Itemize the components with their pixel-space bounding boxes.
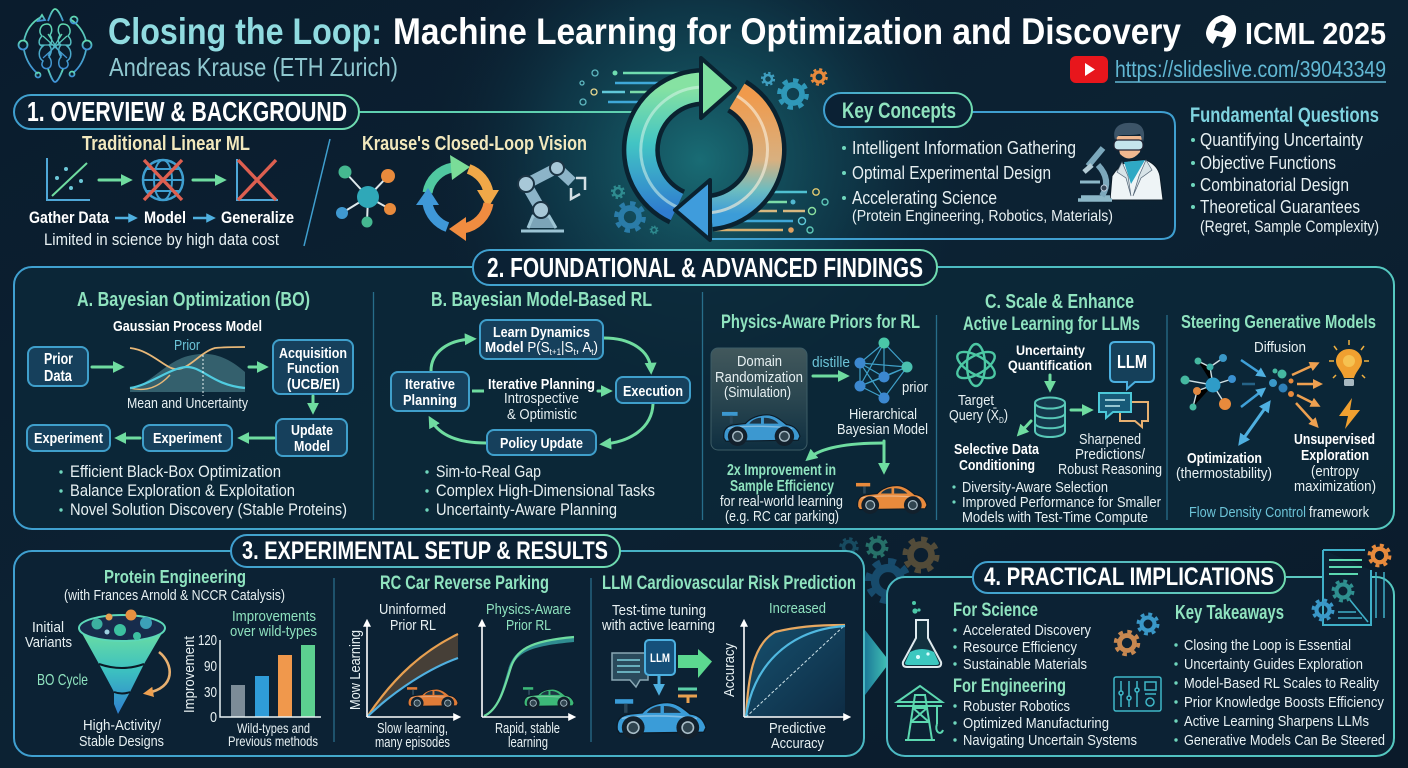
icon: sliders panel xyxy=(1114,677,1161,711)
panel: key concepts xyxy=(824,93,1175,239)
label: initial variants: Initial xyxy=(32,619,64,636)
heading: RC Car Reverse Parking xyxy=(380,573,549,594)
box: domain randomization: Randomization xyxy=(715,369,803,386)
icon: scatter chart xyxy=(47,158,90,200)
icon: database xyxy=(1035,398,1065,437)
arrow xyxy=(92,366,120,368)
callout: 2x improvement: (e.g. RC car parking) xyxy=(725,508,839,525)
bullet list: Models with Test-Time Compute xyxy=(962,509,1148,526)
engineering list: Optimized Manufacturing xyxy=(963,715,1109,732)
label: sharpened predictions xyxy=(1058,431,1162,478)
panel C: scale and enhance xyxy=(949,291,1162,526)
takeaways list: Active Learning Sharpens LLMs xyxy=(1184,713,1369,730)
chart: predictive accuracy: Accuracy xyxy=(771,735,824,752)
label: target query: Target xyxy=(958,392,995,409)
science list: Accelerated Discovery xyxy=(963,622,1091,639)
takeaways list xyxy=(1174,637,1385,749)
section 4: practical implications xyxy=(887,545,1394,756)
double arrow: optimization xyxy=(1241,404,1268,442)
box: prior data xyxy=(28,347,88,386)
box: learn dynamics: t xyxy=(591,347,594,357)
questions list: Combinatorial Design xyxy=(1200,175,1349,195)
caption: flow density control: Flow Density Control xyxy=(1189,504,1306,521)
icon: bayesian network xyxy=(854,338,912,404)
icon: LLM speech bubble: LLM xyxy=(1117,352,1147,372)
science list xyxy=(953,622,1091,673)
caption: Limited in science by high data cost xyxy=(44,230,279,249)
label: uncertainty quantification xyxy=(1008,342,1092,373)
icon: blue car xyxy=(615,699,706,739)
label: prior: prior xyxy=(902,379,928,396)
takeaways list: Uncertainty Guides Exploration xyxy=(1184,656,1363,673)
bar chart: improvements: over wild-types xyxy=(230,623,317,640)
label: uncertainty quantification: Quantification xyxy=(1008,357,1092,373)
box: execution: Execution xyxy=(623,383,683,400)
questions list: Theoretical Guarantees xyxy=(1200,197,1360,217)
heading: key concepts xyxy=(824,93,972,127)
icon: crossed-out generalization chart xyxy=(237,159,278,200)
chart: uninformed prior RL: many episodes xyxy=(375,734,450,751)
label: initial variants: Variants xyxy=(25,634,72,651)
box: experiment xyxy=(143,425,232,451)
box: acquisition function: Acquisition xyxy=(279,345,347,362)
takeaways list: Closing the Loop is Essential xyxy=(1184,637,1351,654)
arrow xyxy=(193,178,222,182)
box: learn dynamics: t xyxy=(573,347,576,357)
key concepts list: Intelligent Information Gathering xyxy=(852,138,1076,158)
box: experiment xyxy=(27,425,110,451)
connector line xyxy=(359,111,640,113)
bullet list: Sim-to-Real Gap xyxy=(436,462,541,481)
box: domain randomization: Domain xyxy=(737,353,782,370)
box: prior data: Prior xyxy=(44,351,73,368)
pipeline labels xyxy=(29,208,294,227)
box: learn dynamics: , A xyxy=(576,339,591,356)
icon: latent cluster xyxy=(1269,368,1294,397)
box: policy update: Policy Update xyxy=(500,435,583,452)
label: selective data conditioning xyxy=(954,441,1040,474)
arrow xyxy=(119,436,140,440)
chart: physics-aware prior RL: Physics-Aware xyxy=(486,601,571,618)
label: test-time tuning: with active learning xyxy=(601,617,715,634)
center label: iterative planning xyxy=(472,376,608,423)
heading: section 1: 1. OVERVIEW & BACKGROUND xyxy=(27,96,347,127)
bullet list: Diversity-Aware Selection xyxy=(962,479,1108,496)
engineering list: Robuster Robotics xyxy=(963,698,1070,715)
heading: section 2: 2. FOUNDATIONAL & ADVANCED FINDINGS xyxy=(487,252,923,283)
section 1: overview and background xyxy=(14,95,640,249)
callout: 2x improvement: 2x Improvement in xyxy=(727,462,836,479)
box: execution xyxy=(616,377,690,403)
chart: gaussian process: Mean and Uncertainty xyxy=(127,395,248,412)
heading: key concepts: Key Concepts xyxy=(842,98,956,123)
chart: predictive accuracy: Increased xyxy=(769,600,826,617)
key concepts list: Accelerating Science xyxy=(852,188,997,208)
label: sharpened predictions: Robust Reasoning xyxy=(1058,461,1162,478)
label: test-time tuning: Test-time tuning xyxy=(612,602,706,619)
icon: gears xyxy=(1116,614,1158,654)
label: diffusion: Diffusion xyxy=(1254,339,1306,356)
title: Machine Learning for Optimization and Discovery xyxy=(393,11,1181,52)
box: update model: Update xyxy=(291,422,333,439)
box: experiment: Experiment xyxy=(34,430,103,447)
chart: gaussian process: Prior xyxy=(174,337,200,354)
chart: predictive accuracy xyxy=(721,600,848,752)
bullet list: Complex High-Dimensional Tasks xyxy=(436,481,655,500)
heading: Protein Engineering xyxy=(104,567,246,587)
label: target query: Query (X̄ xyxy=(949,407,1009,424)
result arrows xyxy=(809,441,884,470)
box: acquisition function: (UCB/EI) xyxy=(287,376,340,393)
label: hierarchical bayesian model xyxy=(837,406,928,438)
label: selective data conditioning: Selective Data xyxy=(954,441,1040,458)
heading: B. Bayesian Model-Based RL xyxy=(431,289,652,311)
label: optimization xyxy=(1176,450,1272,482)
callout: 2x improvement: for real-world learning xyxy=(720,493,843,510)
box: update model: Model xyxy=(294,438,330,455)
icon: LLM speech bubble xyxy=(1110,342,1154,389)
bar chart: improvements: Wild-types and xyxy=(237,720,310,736)
decorative gears around loop xyxy=(612,69,827,234)
chart: uninformed prior RL: Slow learning, xyxy=(377,720,448,737)
generation arrows out xyxy=(1292,364,1319,425)
bullet list: Efficient Black-Box Optimization xyxy=(70,462,281,481)
conference name: ICML 2025 xyxy=(1245,16,1386,51)
questions list: Quantifying Uncertainty xyxy=(1200,130,1363,150)
icon: crossed-out model globe xyxy=(143,160,183,200)
bullet list: Balance Exploration & Exploitation xyxy=(70,481,295,500)
label: test-time tuning xyxy=(601,602,715,634)
label: optimization: (thermostability) xyxy=(1176,465,1272,482)
box: learn dynamics: Learn Dynamics xyxy=(493,324,590,341)
box: iterative planning xyxy=(391,372,469,411)
chart heading: Gaussian Process Model xyxy=(113,318,262,335)
bullet list: Improved Performance for Smaller xyxy=(962,494,1161,511)
chart: physics-aware prior RL: Rapid, stable xyxy=(495,720,560,737)
icon: light bulb xyxy=(1329,340,1369,386)
box: LLM xyxy=(645,640,675,675)
icon: flask xyxy=(903,601,941,667)
icon: brain network logo xyxy=(18,9,92,82)
bar chart: improvements: Improvements xyxy=(232,608,316,625)
icon: molecule xyxy=(336,166,396,228)
arrow: output xyxy=(678,649,712,678)
icon: video play xyxy=(1070,56,1108,83)
arrow: down xyxy=(658,676,660,691)
heading: for science: For Science xyxy=(953,600,1038,621)
box: learn dynamics: |S xyxy=(561,339,573,356)
header xyxy=(18,9,1386,83)
cycle arrows xyxy=(431,338,653,444)
label: target query: D xyxy=(999,416,1004,425)
heading: closed-loop vision: Krause's Closed-Loop Vision xyxy=(362,133,587,155)
heading: section 2 xyxy=(473,250,937,285)
icon: knot logo xyxy=(953,344,999,386)
arrow xyxy=(1048,375,1052,388)
icon: small closed loop xyxy=(416,155,499,241)
subheading: (with Frances Arnold & NCCR Catalysis) xyxy=(64,587,285,604)
arrow xyxy=(1071,408,1089,412)
label: selective data conditioning: Conditioning xyxy=(959,457,1035,474)
chart: predictive accuracy: Accuracy xyxy=(721,643,738,697)
icon: crane xyxy=(897,686,943,740)
label: unsupervised exploration: maximization) xyxy=(1294,478,1376,495)
icon: ICML logo xyxy=(1206,15,1236,48)
subtitle: author: Andreas Krause (ETH Zurich) xyxy=(109,52,398,82)
box: policy update xyxy=(487,430,596,455)
chart: gaussian process xyxy=(127,337,248,412)
arrow xyxy=(312,396,314,410)
bullet list xyxy=(425,462,655,519)
pipeline labels: Gather Data xyxy=(29,208,109,227)
pipeline labels: Model xyxy=(144,208,186,227)
arrow xyxy=(1020,421,1031,433)
box: LLM: LLM xyxy=(650,651,670,665)
caption: flow density control: framework xyxy=(1309,504,1369,521)
questions list xyxy=(1191,130,1379,236)
center label: iterative planning: Introspective xyxy=(504,390,579,407)
heading: Physics-Aware Priors for RL xyxy=(721,312,920,333)
key concepts list: (Protein Engineering, Robotics, Materials) xyxy=(852,208,1113,225)
icon: report with gears xyxy=(1313,545,1390,625)
heading: section 4: 4. PRACTICAL IMPLICATIONS xyxy=(984,563,1274,591)
icon: chat bubble xyxy=(612,653,648,687)
label: optimization: Optimization xyxy=(1187,450,1262,467)
box: domain randomization xyxy=(711,348,807,450)
icon: robot arm xyxy=(518,161,585,231)
box: learn dynamics: t+1 xyxy=(550,347,561,357)
heading: key takeaways: Key Takeaways xyxy=(1175,602,1284,624)
questions list: Objective Functions xyxy=(1200,153,1336,173)
label: stable designs: Stable Designs xyxy=(79,733,164,750)
box: learn dynamics: ) xyxy=(594,339,598,356)
label: unsupervised exploration: Unsupervised xyxy=(1294,431,1375,448)
label: sharpened predictions: Predictions/ xyxy=(1075,446,1146,463)
heading: C. Scale & Enhance xyxy=(985,291,1134,313)
engineering list xyxy=(953,698,1137,749)
label: unsupervised exploration xyxy=(1294,431,1376,495)
bar chart: improvements xyxy=(181,608,321,749)
icon: source molecule xyxy=(1180,354,1236,410)
chart: uninformed prior RL xyxy=(347,601,458,751)
label: target query xyxy=(949,392,1008,425)
arrow: BO cycle loop xyxy=(147,652,170,693)
key concepts list xyxy=(842,138,1113,225)
chart: physics-aware prior RL xyxy=(482,601,574,751)
box: update model xyxy=(276,419,347,456)
big closed loop arrows xyxy=(580,58,860,240)
bar chart: improvements: Improvement xyxy=(181,635,198,713)
engineering list: Navigating Uncertain Systems xyxy=(963,732,1137,749)
icon: orange car xyxy=(856,483,927,514)
bullet list xyxy=(952,479,1161,526)
panel: steering generative models xyxy=(1176,312,1376,521)
panel: RC car reverse parking xyxy=(347,573,574,751)
chart: predictive accuracy: Predictive xyxy=(769,720,826,737)
icon: lightning bolt xyxy=(1339,398,1360,429)
section 2: foundational and advanced findings xyxy=(14,250,1394,529)
heading: LLM Cardiovascular Risk Prediction xyxy=(602,573,856,594)
arrow xyxy=(99,178,128,182)
key concepts list: Optimal Experimental Design xyxy=(852,163,1051,183)
block: fundamental questions xyxy=(1190,104,1379,236)
label: unsupervised exploration: Exploration xyxy=(1301,447,1369,464)
chart: uninformed prior RL: Prior RL xyxy=(390,617,436,634)
icon: scientist with microscope xyxy=(1078,123,1163,200)
arrow: section 3 to section 4 xyxy=(865,630,890,695)
label: hierarchical bayesian model: Bayesian Model xyxy=(837,421,928,438)
callout: 2x improvement xyxy=(720,462,843,525)
label: BO cycle: BO Cycle xyxy=(37,672,88,689)
box: prior data: Data xyxy=(44,368,72,385)
panel: protein engineering xyxy=(25,567,321,750)
bar chart: improvements: 90 xyxy=(204,658,217,675)
bar chart: improvements: Previous methods xyxy=(228,733,318,749)
pipeline labels: Generalize xyxy=(221,208,294,227)
center label: iterative planning: & Optimistic xyxy=(507,406,577,423)
science list: Resource Efficiency xyxy=(963,639,1077,656)
label: unsupervised exploration: (entropy xyxy=(1311,463,1359,480)
box: domain randomization: (Simulation) xyxy=(724,384,791,401)
bullet list: Uncertainty-Aware Planning xyxy=(436,500,617,519)
panel B: Bayesian model-based RL xyxy=(391,289,690,519)
subheading: active learning: Active Learning for LLMs xyxy=(963,314,1140,335)
title xyxy=(108,11,1181,52)
label: hierarchical bayesian model: Hierarchical xyxy=(849,406,917,423)
title: Closing the Loop: xyxy=(108,11,382,52)
icon: tools xyxy=(678,689,697,703)
label: initial variants xyxy=(25,619,72,651)
box: learn dynamics: Model P(S xyxy=(485,339,553,356)
arrow xyxy=(249,366,264,368)
section 3: experimental setup and results xyxy=(14,535,864,756)
icon: blue car xyxy=(722,412,800,446)
box: experiment: Experiment xyxy=(153,430,222,447)
label: uncertainty quantification: Uncertainty xyxy=(1016,342,1085,358)
decorative background gears xyxy=(841,537,937,601)
heading: for engineering: For Engineering xyxy=(953,676,1066,697)
chart: uninformed prior RL: Mow Learning xyxy=(347,630,364,710)
panel: LLM cardiovascular risk prediction xyxy=(601,573,856,752)
panel: physics-aware priors xyxy=(711,312,928,525)
bar chart: improvements: 0 xyxy=(210,709,217,726)
label: sharpened predictions: Sharpened xyxy=(1079,431,1141,448)
box: acquisition function xyxy=(273,340,353,394)
bullet list: Novel Solution Discovery (Stable Proteins) xyxy=(70,500,347,519)
heading: section 3: 3. EXPERIMENTAL SETUP & RESULTS xyxy=(242,537,608,565)
bar chart: improvements: 120 xyxy=(198,632,217,649)
label: stable designs: High-Activity/ xyxy=(83,717,162,734)
chart: physics-aware prior RL: learning xyxy=(508,734,548,751)
bullet list xyxy=(59,462,347,519)
icon: funnel xyxy=(79,610,165,714)
label: target query: ) xyxy=(1004,407,1008,424)
takeaways list: Model-Based RL Scales to Reality xyxy=(1184,675,1379,692)
center label: iterative planning: Iterative Planning xyxy=(488,376,595,393)
callout: 2x improvement: Sample Efficiency xyxy=(730,478,834,495)
science list: Sustainable Materials xyxy=(963,656,1087,673)
bar chart: improvements: 30 xyxy=(204,684,217,701)
icon: chat bubbles xyxy=(1099,393,1148,427)
box: iterative planning: Planning xyxy=(403,392,457,409)
panel A: Bayesian optimization xyxy=(27,289,353,519)
box: iterative planning: Iterative xyxy=(405,376,455,393)
diffusion arrows in xyxy=(1241,360,1263,407)
takeaways list: Prior Knowledge Boosts Efficiency xyxy=(1184,694,1384,711)
chart: physics-aware prior RL: Prior RL xyxy=(506,617,551,634)
heading: traditional linear ML: Traditional Linear ML xyxy=(82,133,250,155)
label: stable designs xyxy=(79,717,164,750)
arrow xyxy=(242,436,274,440)
box: learn dynamics xyxy=(480,320,603,359)
arrow: distill: distille xyxy=(812,354,850,371)
chart: uninformed prior RL: Uninformed xyxy=(379,601,446,618)
heading: A. Bayesian Optimization (BO) xyxy=(77,289,310,311)
box: acquisition function: Function xyxy=(287,360,339,377)
